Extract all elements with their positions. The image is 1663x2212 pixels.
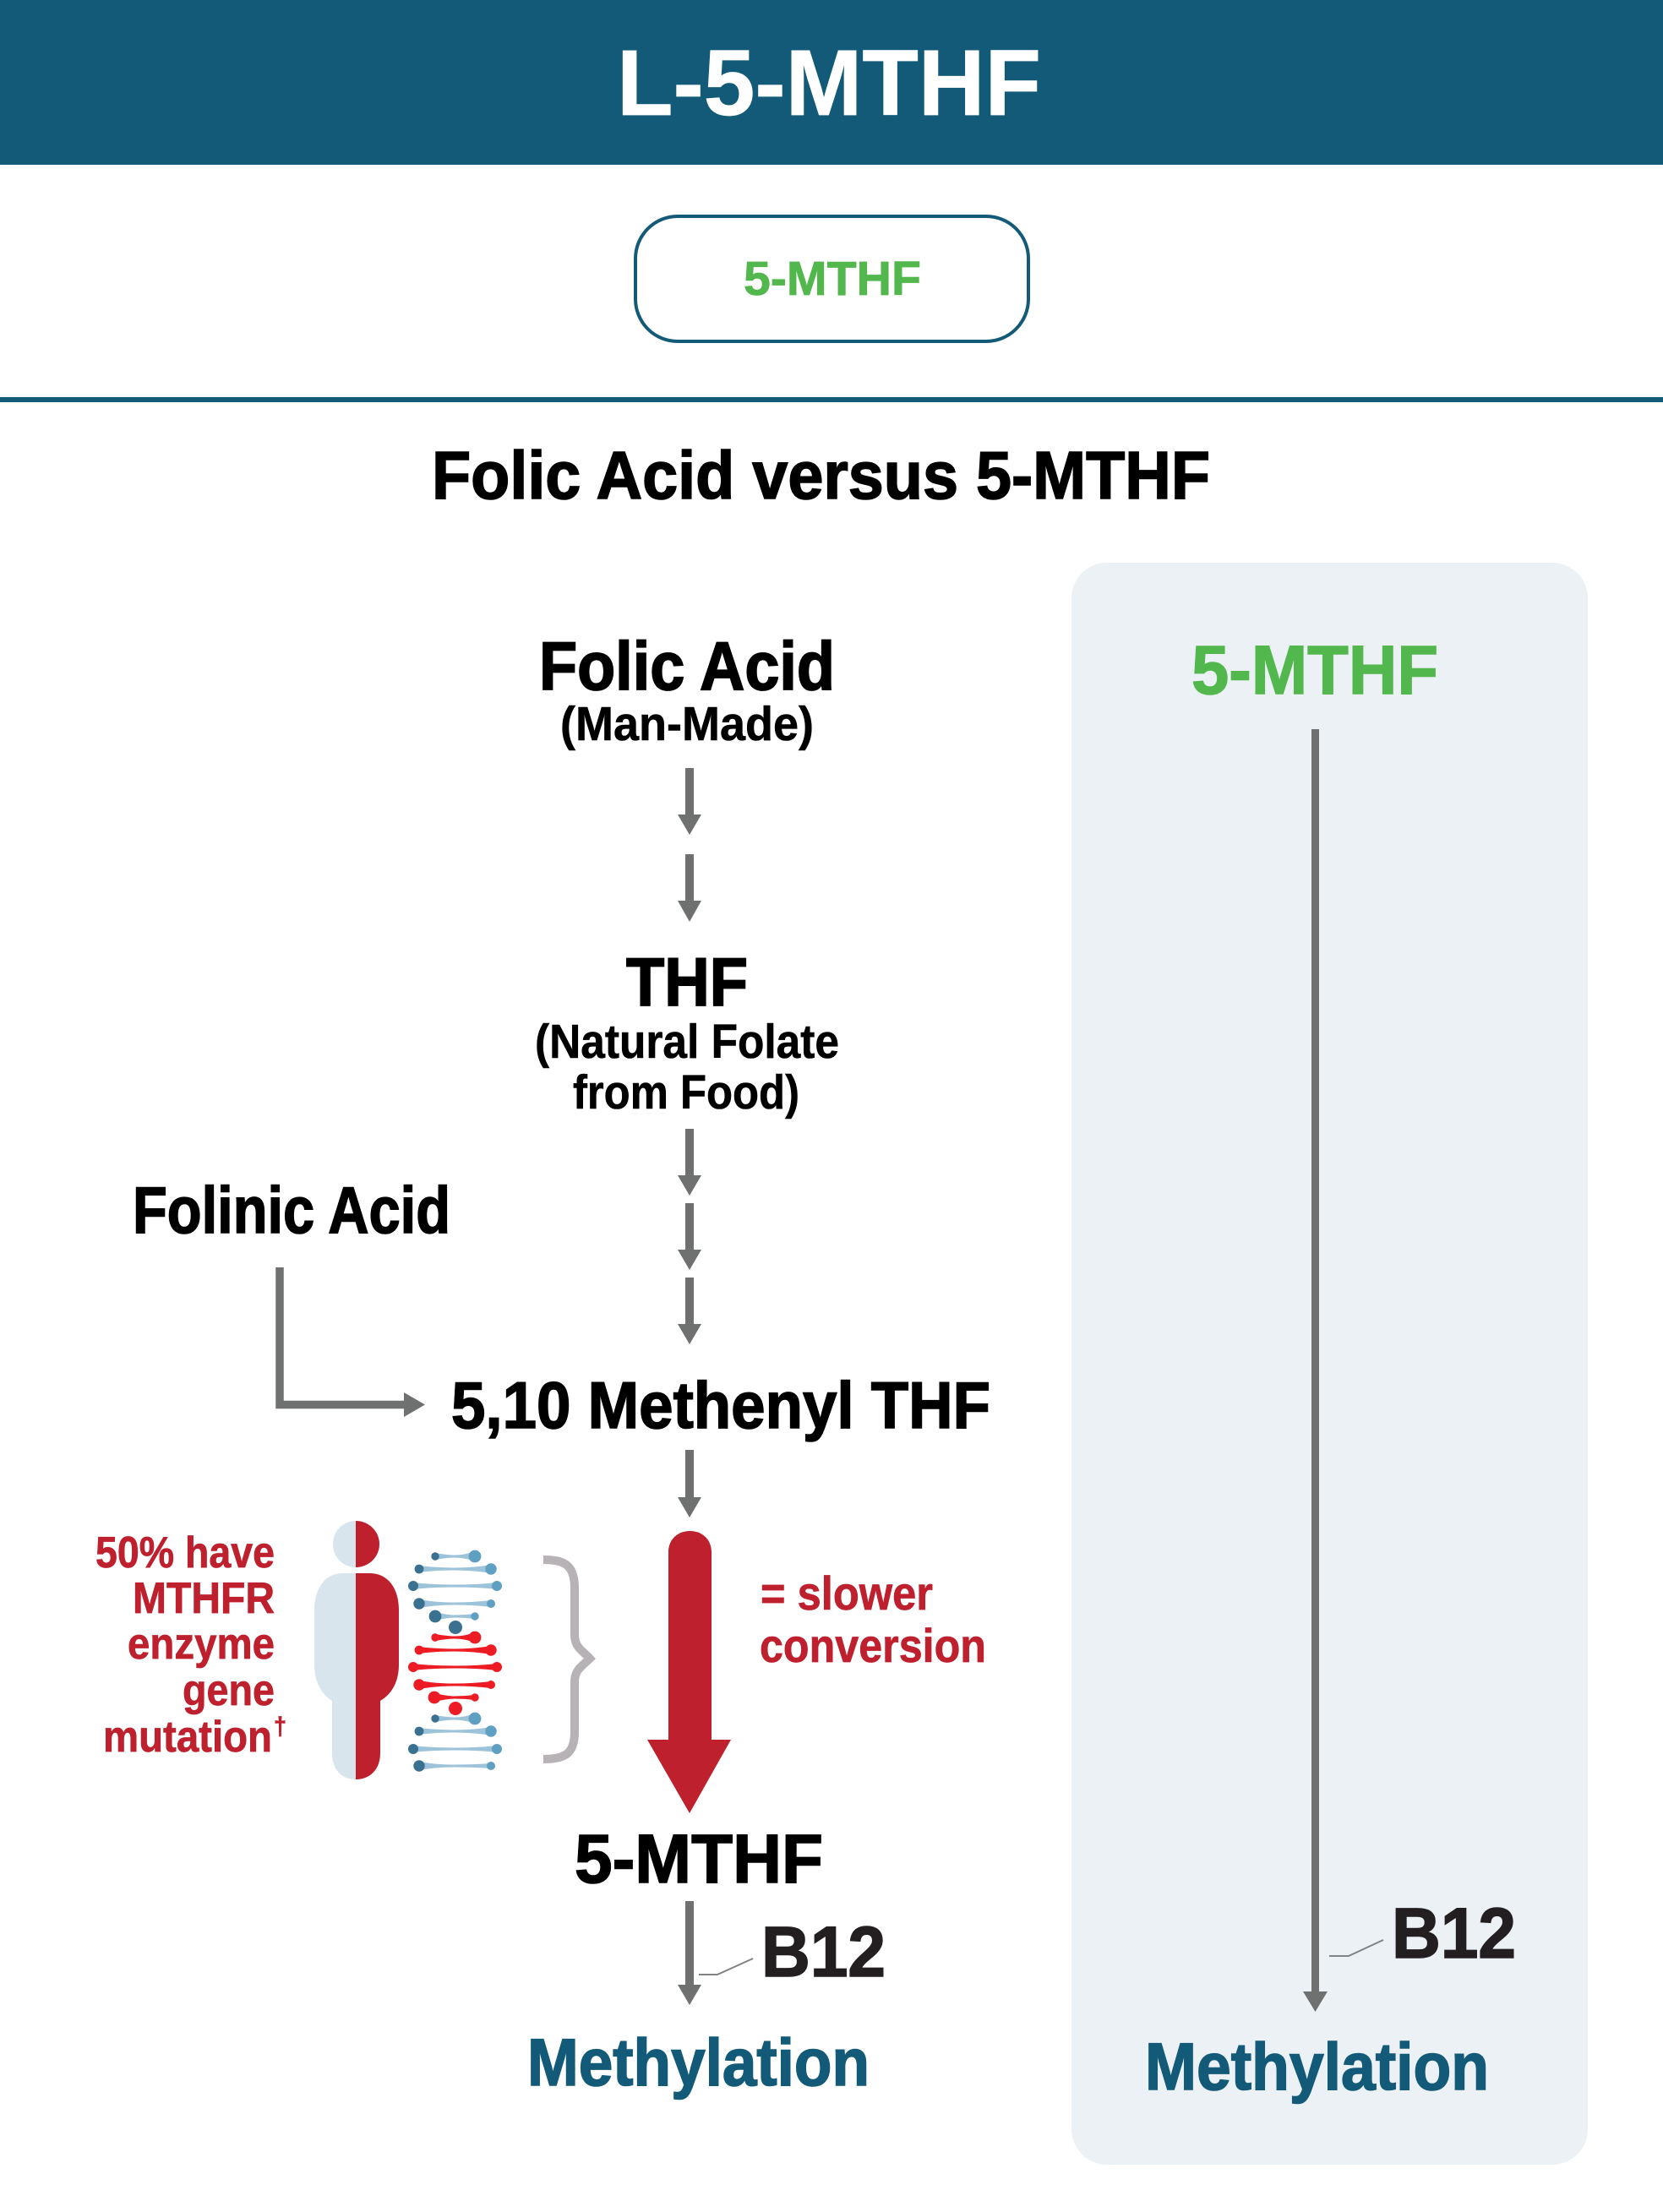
arrow bbox=[678, 1129, 701, 1196]
leader: B12 bbox=[1329, 1940, 1383, 1956]
label: 5-MTHF: 5-MTHF bbox=[1191, 632, 1438, 709]
arrow bbox=[678, 1901, 701, 2005]
callout: 50% have MTHFR enzyme gene mutation: † bbox=[274, 1713, 286, 1741]
label: THF: THF bbox=[626, 945, 748, 1021]
leader: B12 bbox=[699, 1959, 753, 1975]
pill: 5-MTHF: 5-MTHF bbox=[744, 252, 921, 306]
header band bbox=[0, 0, 1663, 165]
label: slower conversion: conversion bbox=[760, 1619, 986, 1672]
callout: 50% have MTHFR enzyme gene mutation: mutation bbox=[103, 1713, 272, 1762]
icon: person bbox=[314, 1521, 399, 1779]
callout: 50% have MTHFR enzyme gene mutation: 50% have bbox=[95, 1528, 275, 1577]
label: Man-Made: (Man-Made) bbox=[560, 697, 814, 751]
label: slower conversion: = slower bbox=[761, 1566, 933, 1620]
arrow bbox=[678, 854, 701, 922]
label: Folinic Acid: Folinic Acid bbox=[133, 1173, 450, 1247]
callout: 50% have MTHFR enzyme gene mutation: MTHFR bbox=[133, 1574, 275, 1623]
label: Methylation: Methylation bbox=[1145, 2029, 1489, 2104]
label: Natural Folate from Food: (Natural Folate bbox=[535, 1015, 839, 1069]
label: Methylation: Methylation bbox=[527, 2024, 870, 2100]
label: 5-MTHF: 5-MTHF bbox=[575, 1821, 823, 1898]
pill: 5-MTHF bbox=[635, 216, 1028, 341]
arrow: slow red arrow bbox=[647, 1531, 731, 1813]
heading: Folic Acid versus 5-MTHF: Folic Acid versus 5-MTHF bbox=[432, 438, 1210, 513]
arrow bbox=[678, 768, 701, 835]
label: B12: B12 bbox=[1392, 1893, 1516, 1973]
panel: 5-MTHF pathway bbox=[1071, 563, 1588, 2165]
icon: DNA strand bbox=[408, 1550, 502, 1772]
arrow bbox=[678, 1203, 701, 1270]
arrow bbox=[678, 1450, 701, 1517]
callout: 50% have MTHFR enzyme gene mutation: gene bbox=[183, 1666, 275, 1715]
label: B12: B12 bbox=[761, 1912, 886, 1991]
title: L-5-MTHF bbox=[617, 31, 1041, 135]
callout: 50% have MTHFR enzyme gene mutation: enzyme bbox=[128, 1620, 275, 1669]
arrow bbox=[678, 1278, 701, 1344]
label: 5,10 Methenyl THF: 5,10 Methenyl THF bbox=[451, 1368, 990, 1442]
callout: 50% have MTHFR enzyme gene mutation bbox=[95, 1528, 286, 1762]
arrow: direct pathway bbox=[1303, 729, 1328, 2012]
icon: brace bbox=[543, 1560, 590, 1759]
arrow: elbow from Folinic Acid bbox=[280, 1267, 425, 1417]
label: Folic Acid: Folic Acid bbox=[539, 629, 835, 705]
label: slower conversion bbox=[760, 1566, 986, 1672]
label: Natural Folate from Food bbox=[535, 1015, 839, 1120]
label: Natural Folate from Food: from Food) bbox=[573, 1065, 799, 1120]
